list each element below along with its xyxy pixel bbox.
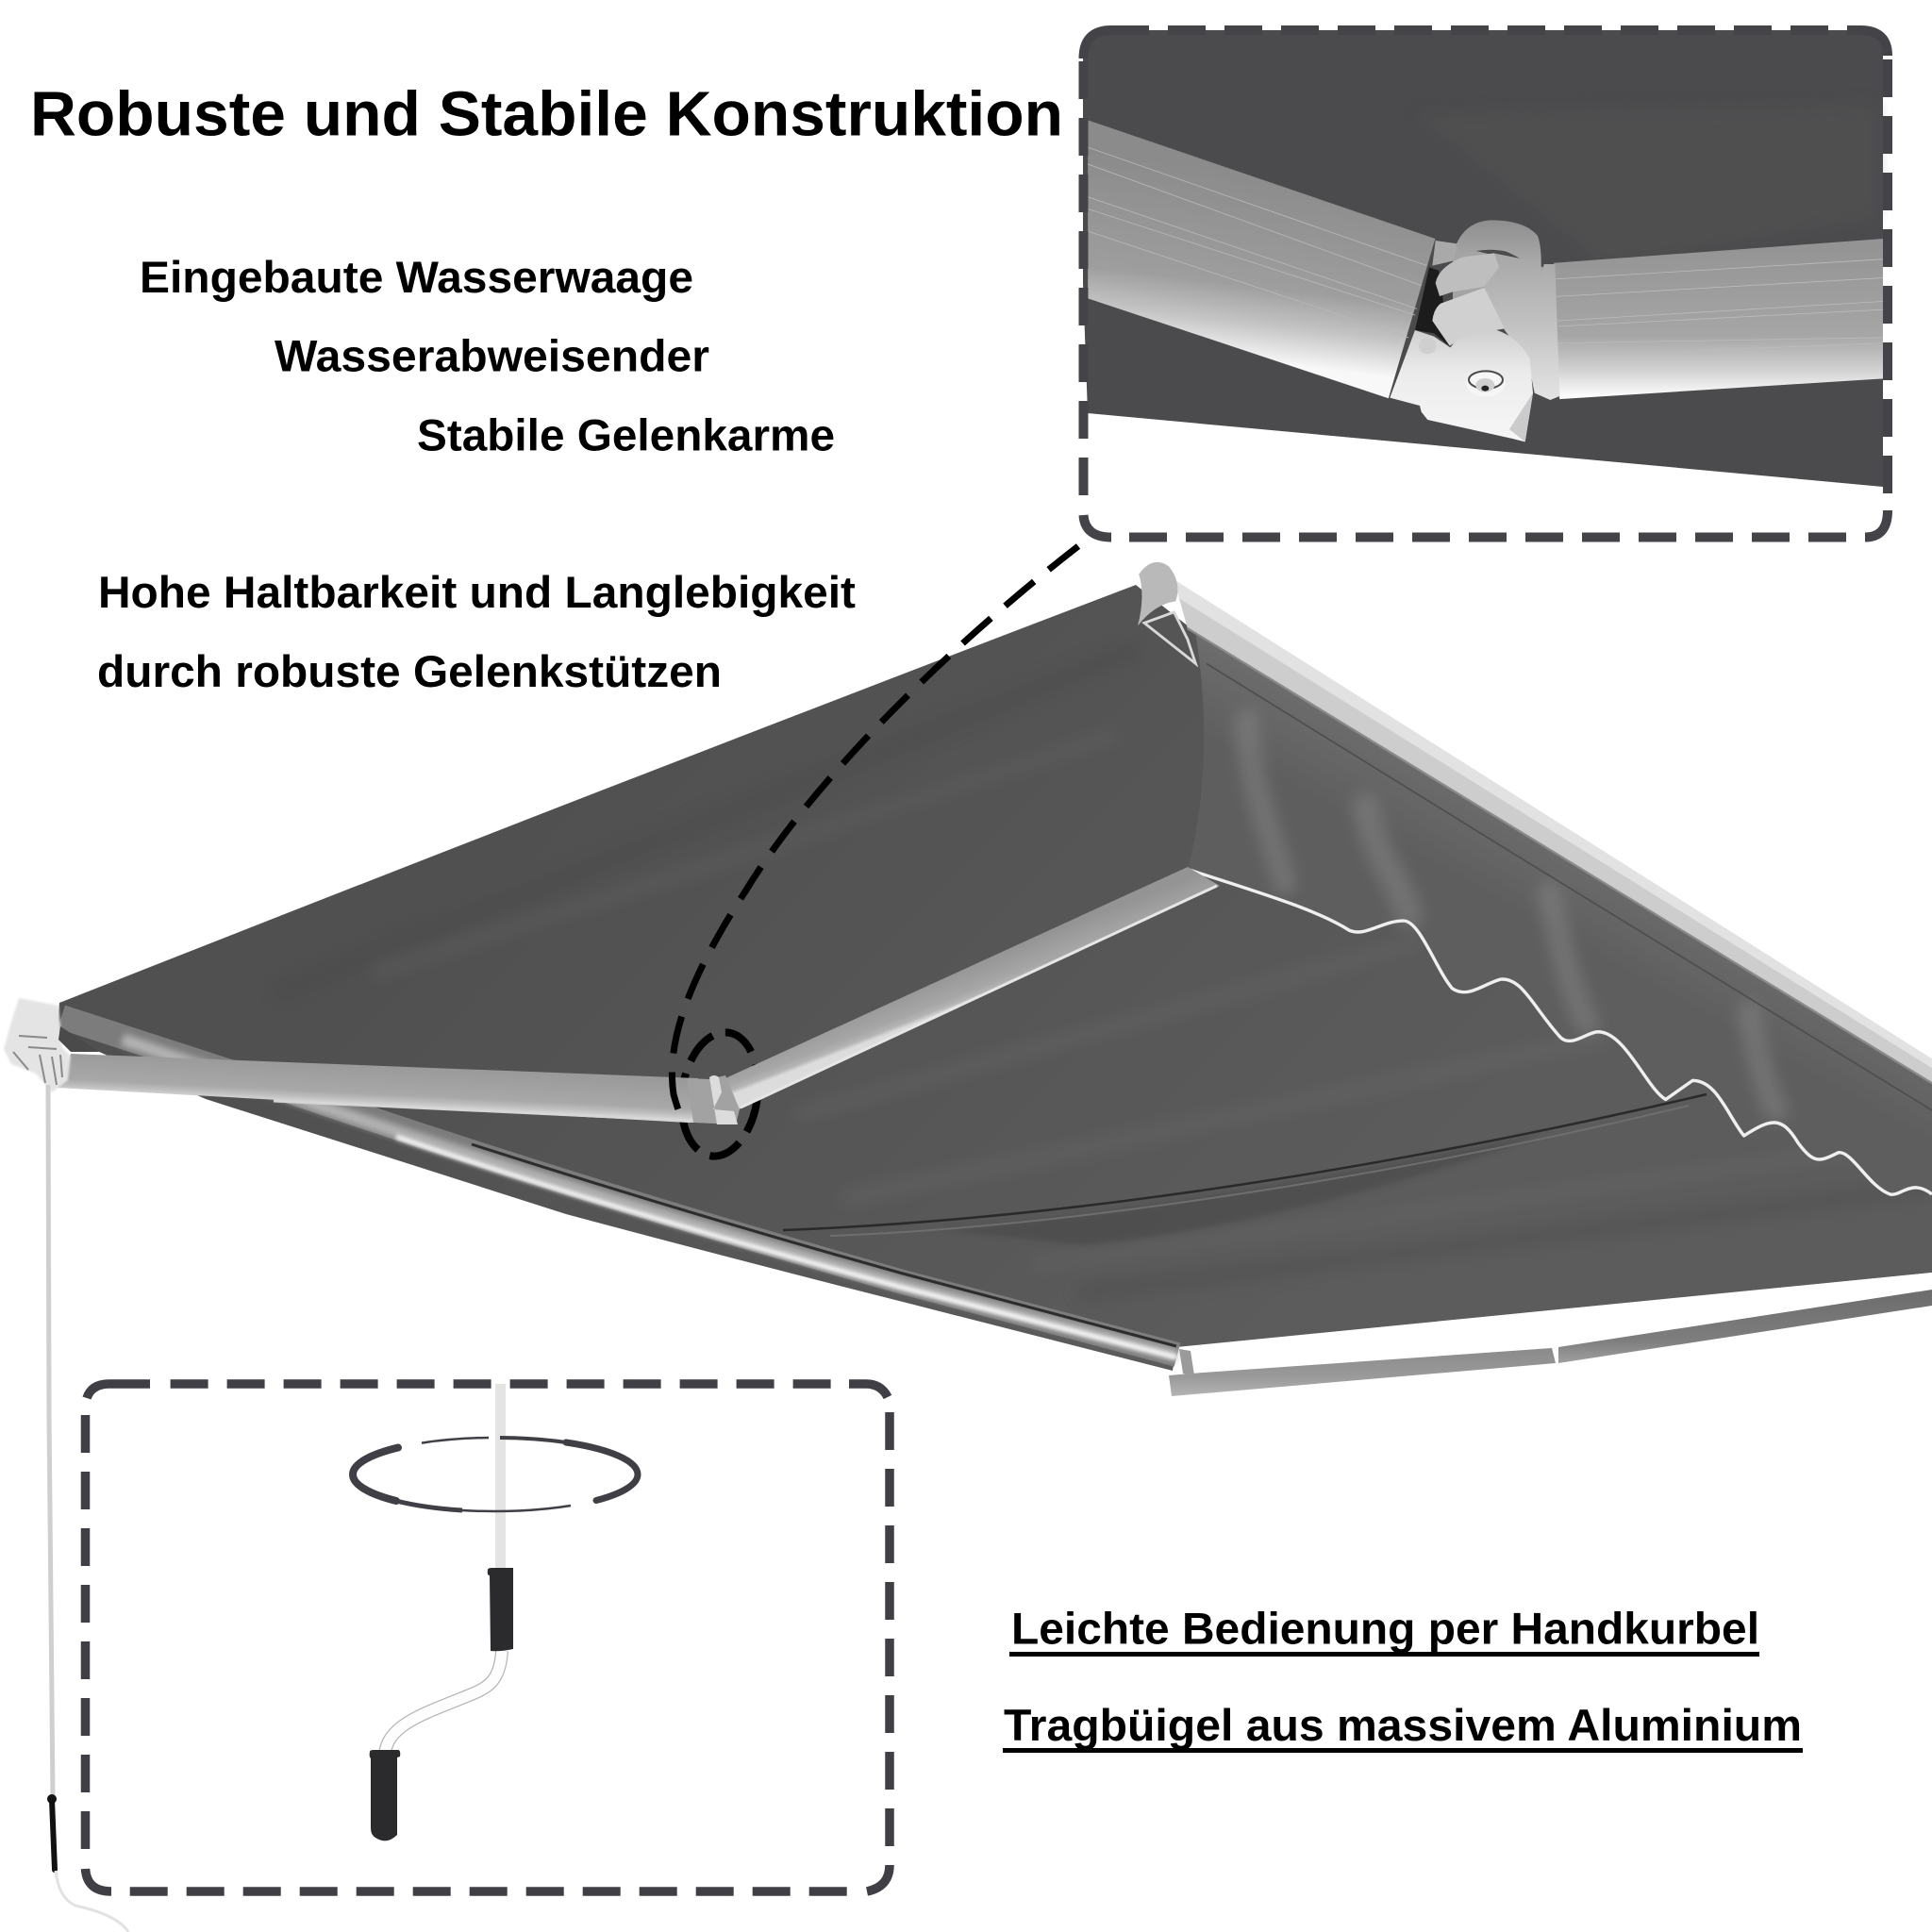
bolt ring [1469,371,1503,389]
bracket silhouette [4,998,71,1092]
crank roller tube [61,1017,1177,1357]
joint circle marker [674,1027,766,1161]
lower handle [370,1750,400,1840]
dark fabric [1083,26,1883,487]
awning canopy fabric [57,585,1932,1371]
rod segment [495,1384,506,1568]
top left corner [87,1384,150,1398]
left arm extrusion [1088,120,1435,398]
rotation ring, right arc [566,1442,638,1500]
durability line 2: durch robuste Gelenkstützen [97,646,722,696]
bolt inner [1475,378,1494,392]
left edge [81,1415,90,1858]
valance fabric [1188,634,1932,1194]
rod [48,1085,53,1798]
bolt hole [1481,386,1489,391]
crank shaft outline [385,1651,502,1755]
bracket dark detail [58,1026,99,1052]
valance group [1138,562,1932,1194]
detail panel: arm joint [1083,26,1888,538]
front bar segment 1 [1169,1348,1556,1396]
left arm [57,1054,713,1123]
left arm light edge [274,1101,693,1121]
bracket label underline [1003,1748,1803,1753]
valance folds [1247,721,1776,1110]
joint body [687,1075,740,1124]
feature text block [140,252,835,460]
valance seam [1207,663,1932,1110]
callout curve from joint to detail panel [672,546,1078,1132]
hinge body [1484,253,1559,400]
top edge [1168,25,1835,35]
canopy fold line [783,1094,1707,1230]
bottom right corner [1865,510,1888,538]
bolt washer [1466,372,1506,387]
durability line 1: Hohe Haltbarkeit und Langlebigkeit [98,567,856,617]
bottom edge [1129,532,1849,541]
bottom plate [1390,328,1533,441]
bracket label: Tragbüigel aus massivem Aluminium [1004,1700,1802,1750]
title: Robuste und Stabile Konstruktion [30,79,1063,149]
right arm [725,867,1220,1109]
rail highlight [1174,579,1932,1068]
rotation ring, top right arc [500,1438,566,1442]
left edge [1079,61,1089,500]
feature: stable arms: Stabile Gelenkarme [417,409,835,460]
upper lobe [1436,253,1499,296]
crank shaft white [385,1651,502,1755]
small rivet [1419,342,1436,355]
back plate [1432,241,1457,266]
feature: water repellent: Wasserabweisender [275,330,709,381]
dashed border [85,1384,890,1891]
rotation ring, lower left arc [396,1501,462,1510]
rotation ring, left arc [353,1447,398,1501]
canopy fold pocket [943,1132,1547,1245]
fabric shading streaks [283,651,1924,1292]
hinge backing [1453,246,1543,299]
rail end bracket [1144,612,1195,663]
panel photo clipped [1083,26,1883,487]
pull rod with crank [47,1085,128,1932]
cable [56,1871,128,1932]
right arm extrusion [1554,239,1883,399]
left arm grooves [1088,147,1426,338]
right edge [1883,59,1892,495]
tube upper shadow line [472,1144,1176,1346]
front bar white strip [1181,1273,1932,1375]
bottom left corner [1083,515,1111,538]
tube bright line [396,1137,1177,1357]
right arm grooves [1556,259,1883,357]
operation text block [1003,1604,1803,1753]
top right corner [849,1384,888,1397]
valance white wavy edge [1188,870,1932,1194]
handle cap [47,1794,57,1804]
joint light detail [709,1075,738,1124]
top knuckle [1456,220,1541,276]
bottom right corner [867,1865,890,1891]
main awning photo [4,562,1932,1396]
zoomed joint arms [1088,120,1883,399]
bottom edge [130,1887,849,1896]
lower lobe [1432,288,1505,346]
top edge [171,1379,840,1389]
plate flange shadow [1509,393,1533,441]
spring gap [1415,267,1450,346]
top left corner [1083,30,1149,58]
dashed border [1083,30,1888,538]
rotation ring, bottom arc [462,1506,571,1511]
feature: spirit level: Eingebaute Wasserwaage [140,252,693,302]
lighter fabric patch [1883,106,1886,216]
crank label underline [1009,1652,1759,1657]
front bar segment 2 [1558,1290,1932,1363]
elbow joint [687,1075,740,1124]
tube midtone [123,1040,1177,1356]
rail [1174,579,1932,1083]
crank label: Leichte Bedienung per Handkurbel [1011,1604,1759,1653]
fold highlight [830,1106,1689,1236]
hinge [1390,220,1559,441]
detail panel: hand crank [85,1384,890,1891]
right edge [885,1412,894,1849]
left wall bracket [4,998,99,1092]
rail lower shadow [1188,628,1932,1083]
rod end handle [52,1800,55,1870]
rotation ring, top arc [422,1438,489,1443]
right arm light edge [741,886,1217,1108]
top right corner [1847,30,1888,56]
bracket details [13,1036,62,1085]
upper handle [488,1568,513,1651]
bottom left corner [85,1869,111,1891]
end cap bracket [1179,1349,1194,1375]
tube base [61,1017,1177,1355]
rail end knob [1138,562,1177,625]
durability text block [97,567,856,696]
